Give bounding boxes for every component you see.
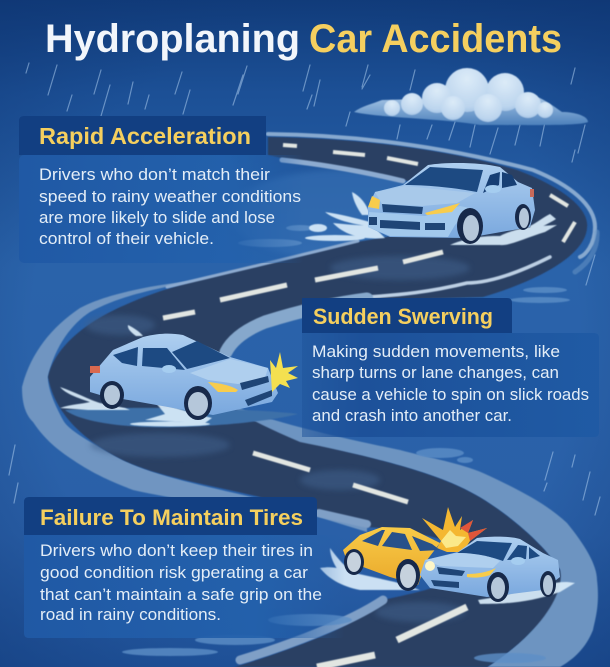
water splash bbox=[320, 548, 575, 604]
heading bar: Failure To Maintain Tires bbox=[40, 505, 303, 530]
road surface bbox=[48, 137, 587, 667]
panel: failure to maintain tires bbox=[24, 497, 345, 638]
heading bar: Rapid Acceleration bbox=[39, 123, 251, 149]
road edge lines bbox=[167, 134, 597, 660]
body text: and crash into another car. bbox=[312, 407, 512, 425]
body text: are more likely to slide and lose bbox=[39, 209, 275, 227]
body text: Drivers who don’t keep their tires in bbox=[40, 542, 313, 560]
heading bar bbox=[19, 116, 266, 155]
car: sudden swerving bbox=[60, 325, 298, 427]
body text: Drivers who don’t match their bbox=[39, 166, 271, 184]
body text: control of their vehicle. bbox=[39, 230, 214, 248]
crash burst bbox=[422, 507, 487, 552]
body text: speed to rainy weather conditions bbox=[39, 188, 301, 206]
water splash bbox=[60, 325, 212, 426]
windows bbox=[405, 167, 517, 193]
panel: rapid acceleration bbox=[19, 116, 304, 263]
cars: failure to maintain tires collision bbox=[320, 507, 575, 604]
panel: sudden swerving bbox=[302, 298, 599, 437]
heading bar bbox=[24, 497, 317, 535]
wet shadow bbox=[65, 408, 298, 427]
curb: right s-bend bbox=[225, 402, 598, 667]
headlight and grille bbox=[90, 366, 272, 406]
curb: left outer bend bbox=[22, 280, 367, 532]
cloud bbox=[354, 68, 588, 125]
heading bar bbox=[302, 298, 512, 333]
body text: road in rainy conditions. bbox=[40, 606, 221, 624]
road lane dashes bbox=[163, 145, 575, 667]
body text bbox=[39, 166, 301, 248]
body text: Making sudden movements, like bbox=[312, 343, 560, 361]
car: rapid acceleration bbox=[305, 163, 557, 245]
rain streaks bbox=[9, 63, 600, 515]
water splash bbox=[305, 192, 557, 245]
windows bbox=[113, 341, 230, 370]
road bbox=[22, 134, 598, 667]
body text: that can’t maintain a safe grip on the bbox=[40, 586, 322, 604]
wheels bbox=[457, 204, 531, 244]
body text bbox=[40, 542, 322, 624]
body text: sharp turns or lane changes, can bbox=[312, 364, 559, 382]
grille bbox=[369, 204, 445, 230]
body text bbox=[312, 343, 589, 425]
title bbox=[45, 17, 562, 61]
road wet patches bbox=[85, 256, 470, 622]
blue car bbox=[420, 537, 560, 602]
spark burst bbox=[270, 352, 298, 392]
title: Hydroplaning bbox=[45, 17, 300, 61]
wheels bbox=[100, 381, 212, 420]
body text: good condition risk gperating a car bbox=[40, 564, 309, 582]
heading bar: Sudden Swerving bbox=[313, 304, 493, 329]
water puddles bbox=[122, 225, 570, 663]
yellow car bbox=[343, 527, 440, 591]
headlights bbox=[368, 196, 460, 215]
body text: cause a vehicle to spin on slick roads bbox=[312, 386, 589, 404]
title: Car Accidents bbox=[309, 17, 562, 61]
